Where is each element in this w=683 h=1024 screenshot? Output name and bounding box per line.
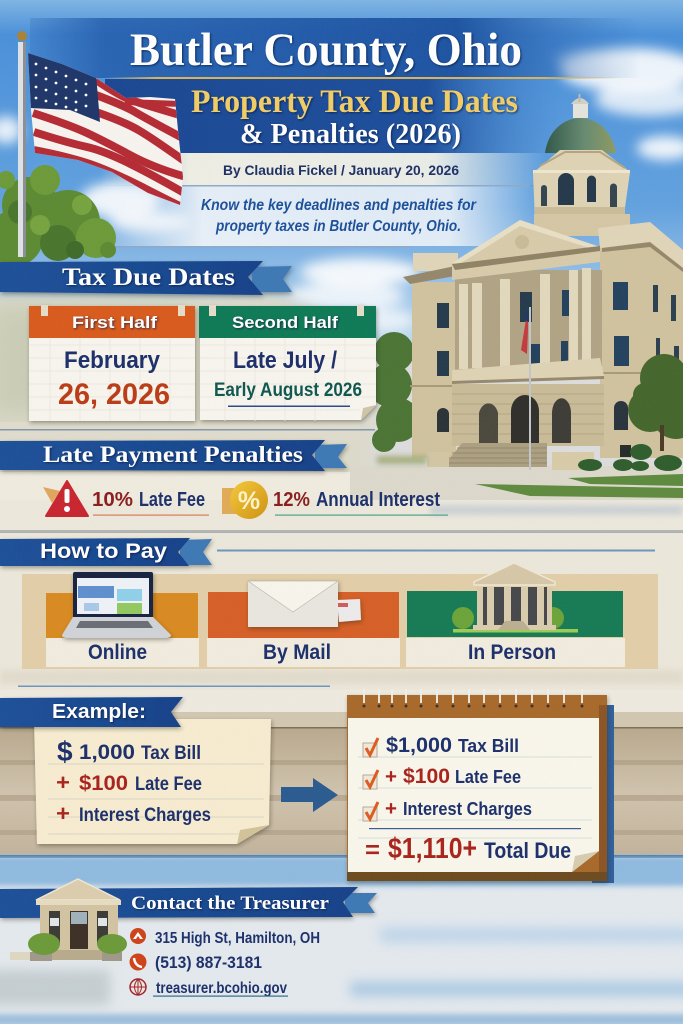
ribbon: example [0, 697, 183, 727]
subtitle line 2: & Penalties (2026) [240, 119, 461, 150]
icon: american flag [28, 53, 183, 205]
steps [427, 443, 594, 470]
ribbon: how to pay [0, 538, 212, 566]
note: example left: Late Fee [135, 774, 202, 795]
ribbon: late payment penalties: Late Payment Penalties [43, 442, 303, 467]
intro text [201, 197, 477, 235]
icon: envelope [248, 581, 361, 627]
card: first half [29, 305, 195, 421]
total due: Total Due [484, 838, 571, 863]
icon: percent seal [222, 481, 268, 519]
background: how to pay paper [0, 533, 683, 690]
penalty: annual interest: Annual Interest [316, 489, 440, 511]
checklist: late fee: Late Fee [455, 767, 521, 787]
contact: website [130, 979, 288, 997]
checklist: late fee [363, 765, 521, 789]
icon: laptop [62, 572, 171, 638]
right wing [598, 222, 683, 458]
cupola drum [533, 150, 630, 236]
background: mid section paper [0, 294, 683, 533]
icon: percent seal: % [238, 487, 260, 515]
lower floor [452, 384, 604, 446]
left wing [403, 253, 458, 458]
contact: address: 315 High St, Hamilton, OH [155, 930, 320, 947]
payment: by mail [207, 581, 400, 667]
total due [365, 833, 571, 865]
byline: By Claudia Fickel / January 20, 2026 [223, 162, 459, 178]
pediment [452, 220, 600, 280]
balustrade [452, 358, 604, 382]
penalty: annual interest [222, 481, 448, 519]
contact: website: treasurer.bcohio.gov [156, 980, 287, 997]
flagpole and small flag [521, 307, 531, 470]
penalty: late fee: 10% [92, 489, 133, 511]
courthouse [368, 94, 683, 498]
intro text: Know the key deadlines and penalties for [201, 197, 477, 214]
card: first half: February [64, 347, 161, 374]
main title: Butler County, Ohio [130, 24, 522, 76]
ribbon: example: Example: [52, 701, 146, 723]
checklist: interest: + [385, 798, 397, 820]
intro text: property taxes in Butler County, Ohio. [215, 218, 461, 235]
icon: treasurer building [10, 879, 127, 961]
note: example left: Interest Charges [79, 805, 211, 826]
section: tax due dates [0, 261, 376, 421]
ribbon: tax due dates: Tax Due Dates [62, 264, 235, 291]
note: example left: + [56, 770, 70, 795]
background: wood planks [0, 690, 683, 858]
section: contact [0, 879, 377, 997]
icon: bank building [452, 563, 578, 632]
note: example left: + [56, 801, 70, 826]
tree right [628, 354, 683, 451]
card: first half: 26, 2026 [58, 378, 170, 411]
note: example left [34, 719, 271, 844]
total due: $1,110+ [388, 833, 477, 865]
flag pole [17, 31, 27, 257]
ribbon: late payment penalties [0, 440, 347, 471]
total due: = [365, 837, 380, 864]
notepad paper [348, 718, 599, 872]
section: late payment penalties [0, 429, 448, 519]
checklist: tax bill: Tax Bill [458, 736, 519, 756]
checklist: interest [363, 798, 532, 821]
portico [452, 220, 604, 446]
title banner [30, 18, 640, 248]
arrow [281, 778, 338, 812]
subtitle: Property Tax Due Dates [191, 84, 518, 120]
ribbon: contact: Contact the Treasurer [131, 893, 330, 914]
tree behind courthouse left [368, 332, 420, 452]
lawn [377, 456, 683, 498]
ribbon: tax due dates [0, 261, 292, 295]
payment: online: Online [88, 641, 147, 664]
ribbon: contact [0, 887, 377, 918]
contact: phone: (513) 887-3181 [155, 954, 262, 972]
checklist: late fee: $100 [403, 765, 450, 788]
card: first half: First Half [72, 313, 157, 332]
background: sky [0, 0, 683, 345]
checklist: interest: Interest Charges [403, 799, 532, 819]
card: second half: Late July / [233, 347, 337, 374]
card: second half [199, 305, 376, 421]
card: second half: Second Half [232, 313, 338, 332]
note: example left: $ [57, 736, 73, 767]
section: example [0, 689, 614, 883]
section: how to pay [0, 538, 658, 687]
contact: address [130, 928, 320, 947]
penalty: late fee [43, 481, 209, 516]
payment: in person [406, 563, 625, 667]
background: bottom watercolor [0, 856, 683, 1024]
note: example left: $100 [79, 772, 128, 795]
notepad rings [364, 689, 582, 703]
note: example left: Tax Bill [141, 743, 201, 764]
checklist: tax bill: $1,000 [386, 734, 452, 757]
penalty: late fee: Late Fee [139, 489, 205, 511]
dome [545, 94, 616, 153]
ribbon: how to pay: How to Pay [40, 540, 167, 563]
payment: by mail: By Mail [263, 641, 331, 664]
checklist: late fee: + [385, 766, 397, 788]
tan panel [22, 574, 658, 669]
payment: in person: In Person [468, 641, 556, 664]
checklist: tax bill [363, 734, 519, 757]
card: second half: Early August 2026 [214, 380, 362, 401]
penalty: annual interest: 12% [273, 489, 310, 511]
notepad [347, 689, 614, 883]
icon: warning triangle [43, 481, 88, 516]
tree left [0, 165, 116, 266]
payment: online [46, 572, 199, 667]
note: example left: 1,000 [79, 741, 135, 764]
columns [459, 268, 591, 369]
shrubs [578, 444, 682, 471]
